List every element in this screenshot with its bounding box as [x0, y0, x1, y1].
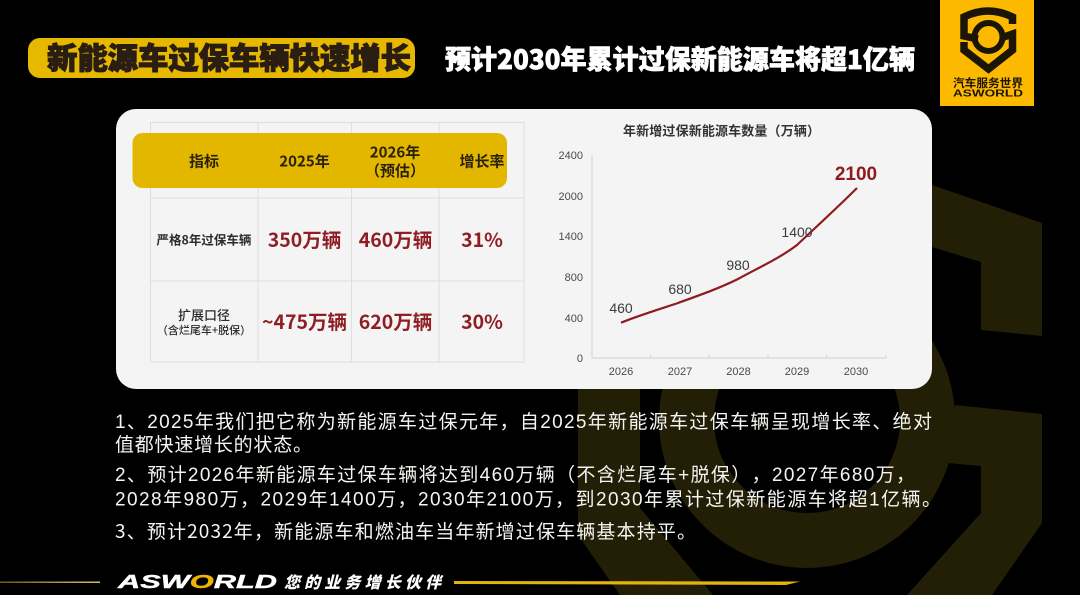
icon: shield logo — [964, 11, 1012, 69]
row: extended scope — [157, 305, 503, 338]
highlighted value 2100: 2100 — [835, 164, 877, 185]
row: extended scope: 620万辆 — [359, 306, 432, 335]
data labels: 460 — [609, 300, 633, 316]
trend line — [621, 188, 857, 323]
logo badge: 汽车服务世界 — [953, 75, 1024, 91]
table header band: （预估） — [365, 160, 425, 181]
body text: point 2: 2028年980万，2029年1400万，2030年2100万，到2030年累计过保新能源车将超1亿辆。 — [115, 488, 941, 510]
footer line — [454, 581, 800, 585]
row: extended scope: （含烂尾车+脱保） — [157, 322, 251, 338]
row: strict 8 year: 31% — [461, 224, 503, 253]
y axis labels: 800 — [565, 272, 583, 284]
row: extended scope: 扩展口径 — [178, 305, 230, 324]
subtitle: 预计2030年累计过保新能源车将超1亿辆 — [445, 38, 915, 77]
table header band: 指标 — [189, 150, 219, 172]
table header band: 2025年 — [279, 150, 330, 172]
footer — [0, 569, 800, 593]
x axis labels: 2027 — [668, 366, 692, 378]
row: strict 8 year: 严格8年过保车辆 — [157, 230, 252, 248]
body text: point 1: 值都快速增长的状态。 — [115, 434, 312, 456]
watermark: large shield S logo — [578, 185, 1042, 595]
body text: point 1: 1、2025年我们把它称为新能源车过保元年，自2025年新能源车过保车辆呈现增长率、绝对 — [115, 411, 932, 433]
x axis labels: 2030 — [844, 366, 868, 378]
body text: point 2 — [115, 464, 941, 510]
data labels: 980 — [726, 257, 750, 273]
data labels: 680 — [668, 281, 692, 297]
body text: point 3: 3、预计2032年，新能源车和燃油车当年新增过保车辆基本持平。 — [115, 517, 696, 544]
footer brand: AS W O RLD — [116, 572, 277, 592]
logo badge: ASWORLD — [953, 88, 1023, 100]
data labels: 1400 — [781, 224, 813, 240]
y axis labels: 2400 — [559, 150, 583, 162]
y axis labels: 0 — [577, 353, 583, 365]
y axis labels — [559, 150, 583, 365]
y axis labels: 1400 — [559, 231, 583, 243]
table header band: 2026年 — [370, 142, 420, 162]
body text: point 2: 2、预计2026年新能源车过保车辆将达到460万辆（不含烂尾车+脱保），2027年680万， — [115, 464, 915, 486]
x axis labels: 2026 — [609, 366, 633, 378]
footer slogan: 您的业务增长伙伴 — [284, 569, 444, 593]
chart title: 年新增过保新能源车数量（万辆） — [623, 120, 820, 140]
data table — [132, 122, 524, 362]
row: strict 8 year: 350万辆 — [268, 224, 341, 253]
y axis labels: 2000 — [559, 191, 583, 203]
data labels — [609, 224, 813, 316]
row: strict 8 year: 460万辆 — [359, 224, 432, 253]
x axis labels: 2028 — [726, 366, 751, 378]
title pill: 新能源车过保车辆快速增长 — [47, 34, 411, 78]
panel: table and chart card — [116, 109, 932, 389]
logo badge — [940, 0, 1034, 106]
x axis labels: 2029 — [785, 366, 809, 378]
table header band: 增长率 — [459, 150, 505, 172]
body text: point 1 — [115, 411, 932, 456]
x axis labels — [609, 366, 868, 378]
line chart — [559, 120, 886, 378]
row: extended scope: ~475万辆 — [262, 306, 347, 335]
table header band — [132, 133, 507, 188]
row: strict 8 year — [157, 224, 503, 253]
row: extended scope: 30% — [461, 306, 503, 335]
y axis labels: 400 — [565, 313, 583, 325]
